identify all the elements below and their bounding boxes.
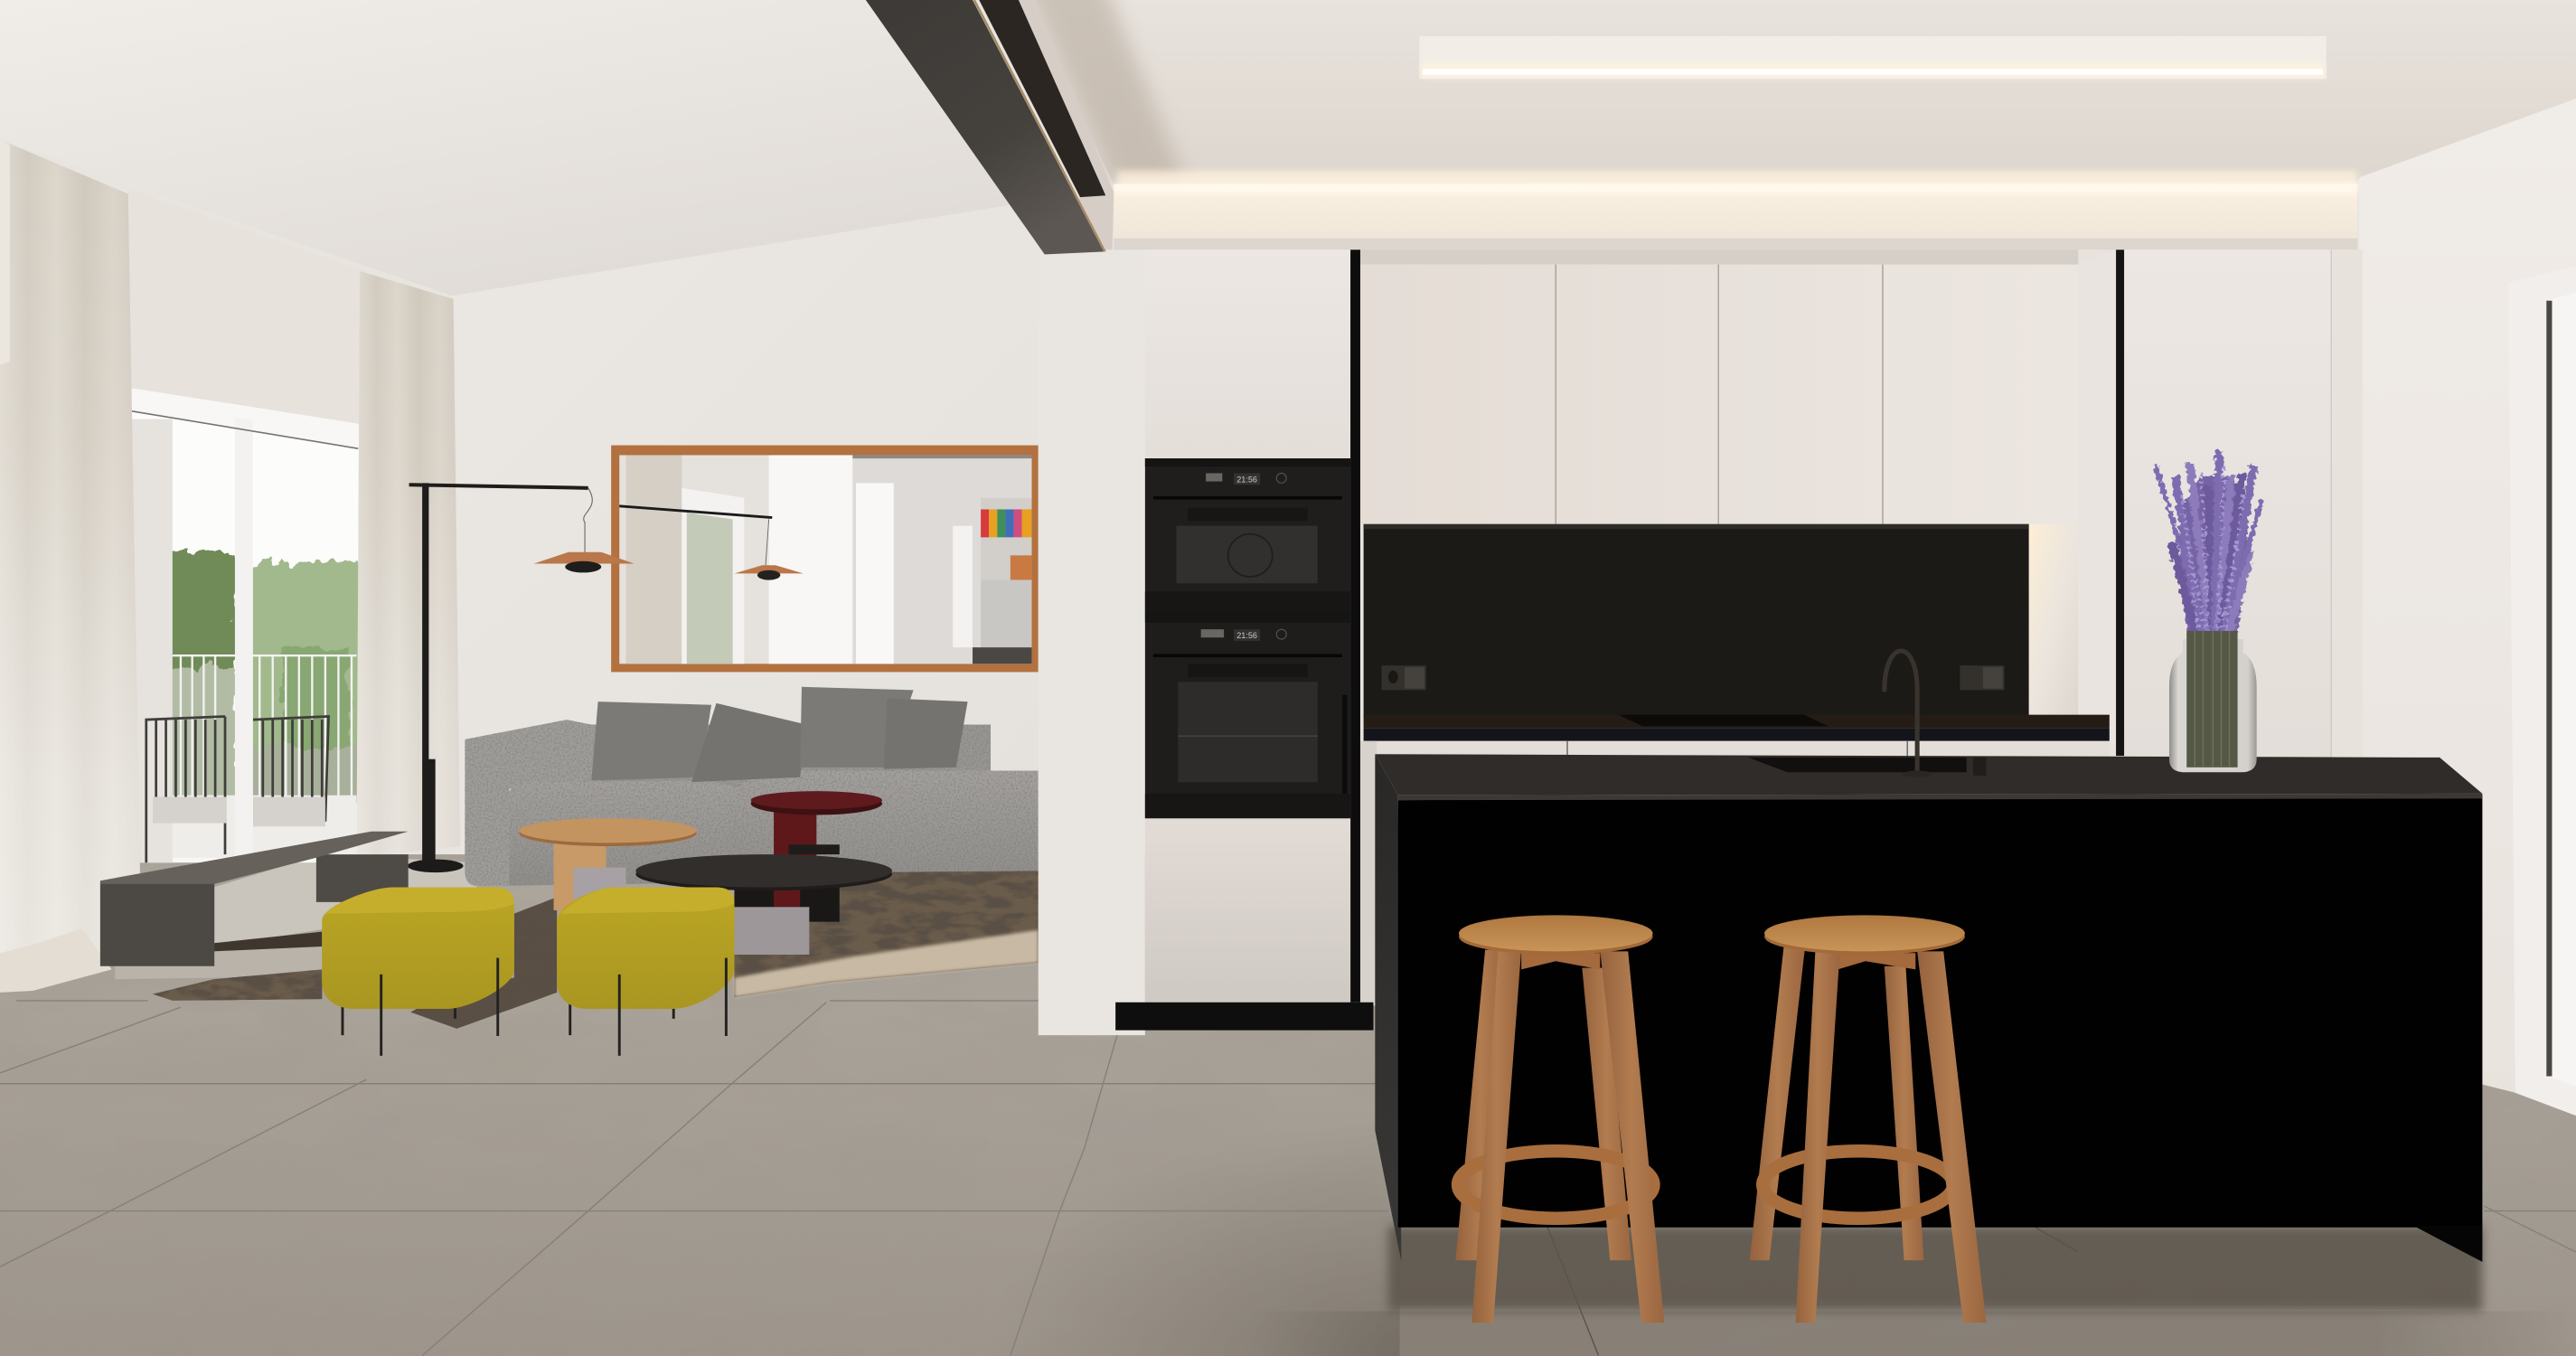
upper wall cabinets (1360, 250, 2078, 524)
mirror reflection: bookshelves (973, 498, 1031, 664)
sofa (465, 687, 1039, 886)
lavender highlights (2182, 464, 2244, 627)
oven column upper cabinet (1145, 250, 1350, 458)
right wall (2359, 99, 2576, 1116)
oven clock display (1234, 629, 1260, 641)
wood side table (519, 818, 697, 910)
window mullion (235, 418, 253, 858)
seat (1764, 918, 1965, 955)
front legs (1796, 950, 1840, 1323)
cove light band (1114, 171, 2357, 250)
lit niche (2029, 524, 2078, 718)
mirror (611, 446, 1039, 672)
bronze edge (974, 0, 1105, 253)
foot ring (1763, 1151, 1953, 1219)
bench top (100, 832, 409, 884)
beam main face (866, 0, 1105, 255)
right window (2508, 266, 2576, 1116)
oven clock display: 21:56 (1236, 475, 1257, 484)
sofa arm (465, 720, 599, 886)
oven window (1176, 526, 1318, 583)
sofa back (583, 725, 991, 790)
foot ring (1458, 1151, 1653, 1219)
lavender bouquet (2156, 450, 2262, 641)
yellow pouf left (322, 888, 514, 1056)
floor lamp (408, 483, 635, 872)
island front (1398, 796, 2482, 1228)
socket left (1382, 665, 1426, 690)
mirror reflection: window (682, 488, 744, 664)
induction hob (1618, 715, 1829, 726)
stems (2186, 631, 2238, 767)
linear ceiling light (1419, 36, 2327, 79)
sink (1748, 758, 1967, 772)
rug (153, 871, 1039, 1029)
bouquet core (2178, 476, 2247, 641)
front legs (1472, 950, 1521, 1323)
sofa chaise (728, 770, 1039, 879)
balcony window (130, 388, 368, 862)
floor shadow under island (1388, 1226, 2482, 1311)
cushions (591, 687, 968, 782)
bench front block (100, 882, 214, 966)
lower oven (1145, 613, 1350, 818)
plinth (1115, 1003, 1374, 1031)
back legs (1455, 950, 1505, 1260)
tile joints (0, 1001, 2576, 1356)
island top (1375, 754, 2482, 796)
back legs (1750, 943, 1806, 1260)
ceiling beam (866, 0, 1114, 255)
faucet (1885, 651, 1986, 777)
trees outside (165, 554, 368, 800)
oven window (1178, 682, 1318, 782)
countertop (1364, 715, 2110, 741)
bar stool left (1455, 915, 1664, 1323)
floor (0, 854, 2576, 1356)
oven column lower cabinet (1145, 818, 1350, 1003)
mirror reflection: white corridor (769, 455, 852, 664)
white panel beside island (1360, 741, 1377, 1003)
lamp shade (534, 552, 635, 572)
bright floor by the window (213, 854, 476, 946)
lavender spikes (2156, 450, 2262, 633)
glass vase (2169, 639, 2257, 772)
pale ceiling return (1015, 0, 1114, 250)
vase of lavender (2156, 450, 2262, 772)
red side table (751, 791, 882, 856)
oven clock display: 21:56 (1236, 631, 1257, 640)
black coffee table (635, 854, 892, 955)
backsplash (1364, 524, 2029, 716)
seat bracket (1521, 953, 1600, 969)
balcony chairs (146, 716, 329, 862)
island side (1375, 754, 1401, 1262)
right ceiling (1015, 0, 2576, 184)
bar stool right (1750, 915, 1986, 1323)
balcony exterior wall (130, 419, 173, 862)
mirror reflection: curtain (626, 455, 682, 664)
central pillar (1039, 250, 1145, 1035)
mirror reflection: lamp (619, 506, 804, 580)
socket right (1960, 665, 2004, 690)
metal bench (100, 832, 409, 966)
right curtain of window (356, 271, 460, 858)
drawer strip below counter (1364, 741, 2110, 758)
balcony railing (173, 655, 356, 797)
seat bracket (1838, 953, 1915, 969)
tall right cabinet (2078, 250, 2363, 766)
living room ceiling (0, 0, 1051, 296)
mirror reflection: far room (852, 455, 1031, 664)
upper oven (1145, 458, 1350, 613)
kitchen island (1375, 651, 2482, 1262)
beam dark slot (979, 0, 1105, 197)
bench rear leg (316, 854, 409, 902)
floor shadow towards island (986, 1117, 1400, 1356)
back wall (452, 201, 1039, 788)
oven clock display (1234, 473, 1260, 485)
black gap strip (1350, 250, 1360, 1003)
left curtain (0, 139, 141, 993)
sofa left seat (509, 780, 744, 886)
kitchen back wall behind cabinets (1145, 250, 2361, 1005)
yellow pouf right (557, 888, 734, 1056)
left wall above window (128, 189, 365, 430)
seat (1459, 918, 1653, 955)
